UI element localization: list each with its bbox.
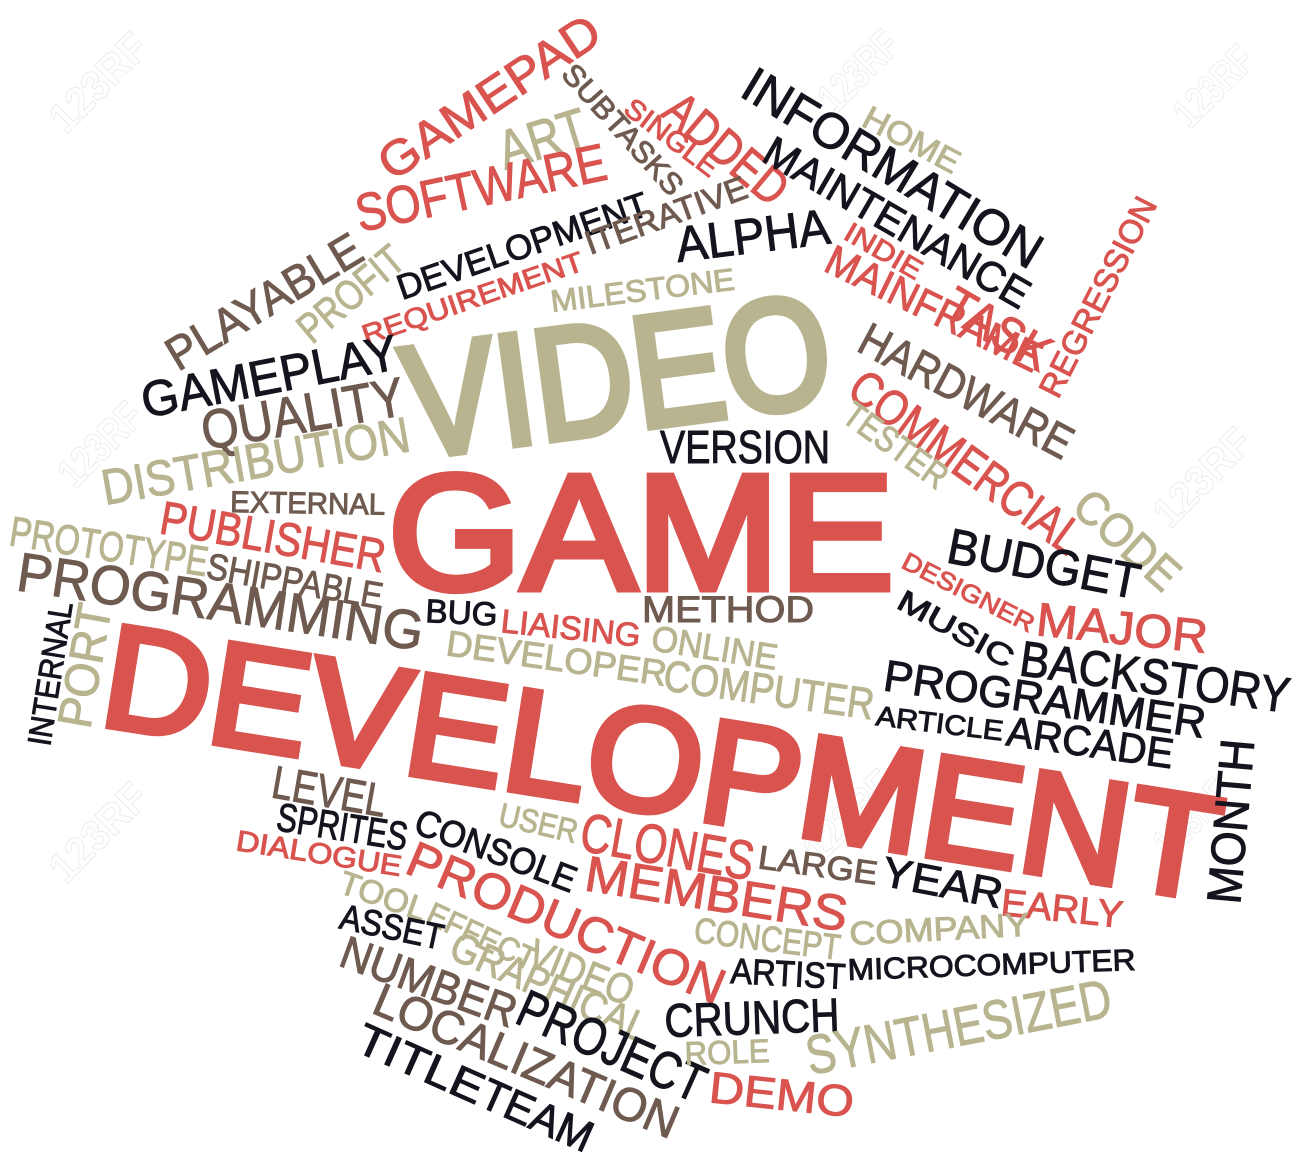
word: artist: ARTIST [730,950,847,997]
word: music: MUSIC [892,584,1020,675]
word: indie: INDIE [839,216,928,286]
word: clones: CLONES [576,801,759,892]
word: asset: ASSET [336,896,448,958]
word: playable: PLAYABLE [156,222,372,381]
word: port: PORT [49,600,123,732]
word: level: LEVEL [268,756,391,827]
word: maintenance: MAINTENANCE [756,127,1039,318]
word: crunch: CRUNCH [663,988,840,1047]
word: regression: REGRESSION [1031,190,1164,403]
word: number: NUMBER [334,926,524,1037]
word: external: EXTERNAL [230,486,385,522]
word: project: PROJECT [508,979,715,1114]
word: dialogue: DIALOGUE [234,825,404,883]
word: programmer: PROGRAMMER [881,651,1209,748]
word: tester: TESTER [835,393,956,497]
word: single: SINGLE [618,92,725,183]
word: art: ART [490,96,595,181]
word: production: PRODUCTION [399,831,734,1015]
word: profit: PROFIT [288,236,414,352]
word: article: ARTICLE [874,700,1005,747]
word: publisher: PUBLISHER [156,491,390,582]
word: online: ONLINE [649,617,781,678]
word: arcade: ARCADE [1004,707,1177,777]
word: version: VERSION [660,421,830,473]
word: shippable: SHIPPABLE [204,546,386,617]
word: graphical: GRAPHICAL [443,922,656,1051]
word: iterative: ITERATIVE [580,169,752,262]
word: effect: EFFECT [421,895,543,978]
word: year: YEAR [878,848,1007,917]
word: console: CONSOLE [409,801,583,900]
word: task: TASK [934,276,1062,382]
word: bug: BUG [425,592,498,633]
word: programming: PROGRAMMING [13,541,428,662]
word: month: MONTH [1198,737,1265,906]
word cloud: video game development: 123RF [39,773,157,891]
word: role: ROLE [684,1032,770,1072]
word: quality: QUALITY [196,365,409,462]
word: code: CODE [1063,478,1192,601]
word: tool: TOOL [335,864,432,928]
word: liaising: LIAISING [499,602,642,654]
word: software: SOFTWARE [350,133,612,244]
word cloud: video game development: 123RF [1143,418,1261,536]
word: large: LARGE [756,838,880,892]
word: major: MAJOR [1034,592,1211,663]
word: concept: CONCEPT [692,909,843,968]
word: subtasks: SUBTASKS [555,58,690,202]
title word: Game: GAME [388,441,894,624]
word: milestone: MILESTONE [549,262,736,319]
word cloud: video game development: 123RF [793,760,904,871]
word: distribution: DISTRIBUTION [97,407,414,516]
word: internal: INTERNAL [20,599,80,748]
word cloud: video game development: 123RF [808,21,909,121]
word: team: TEAM [473,1069,601,1162]
word cloud: video game development: 123RF [48,392,152,496]
word cloud: video game development: 123RF [1163,36,1264,136]
word: microcomputer: MICROCOMPUTER [847,944,1136,987]
word: designer: DESIGNER [897,547,1039,638]
title word: Video: VIDEO [393,261,841,492]
word: company: COMPANY [848,906,1030,952]
word: commercial: COMMERCIAL [839,359,1094,566]
word: early: EARLY [999,882,1125,937]
word: video small: VIDEO [522,930,641,1015]
word: computer: COMPUTER [661,651,877,729]
word: title: TITLE [349,1014,492,1114]
word: synthesized: SYNTHESIZED [800,967,1117,1087]
word: sprites: SPRITES [274,795,411,860]
word: members: MEMBERS [581,846,852,942]
word: budget: BUDGET [943,518,1145,610]
word: added: ADDED [653,81,800,217]
word cloud: video game development: 123RF [1143,769,1240,866]
word: hardware: HARDWARE [850,312,1083,469]
title word: Development: DEVELOPMENT [92,594,1232,931]
word: demo: DEMO [707,1063,856,1127]
word: mainframe: MAINFRAME [818,236,1050,381]
word: method: METHOD [642,589,814,630]
word: user: USER [495,796,582,850]
word cloud: video game development: 123RF [39,23,157,141]
word: prototype: PROTOTYPE [7,507,211,585]
word: development small: DEVELOPMENT [392,185,653,308]
word: developer: DEVELOPER [444,622,669,694]
word: requirement: REQUIREMENT [358,246,587,351]
word: alpha: ALPHA [673,198,834,273]
word: localization: LOCALIZATION [366,972,687,1149]
word: gamepad: GAMEPAD [368,4,611,191]
word: gameplay: GAMEPLAY [136,324,402,429]
word: information: INFORMATION [732,56,1053,280]
word: home: HOME [857,99,967,180]
